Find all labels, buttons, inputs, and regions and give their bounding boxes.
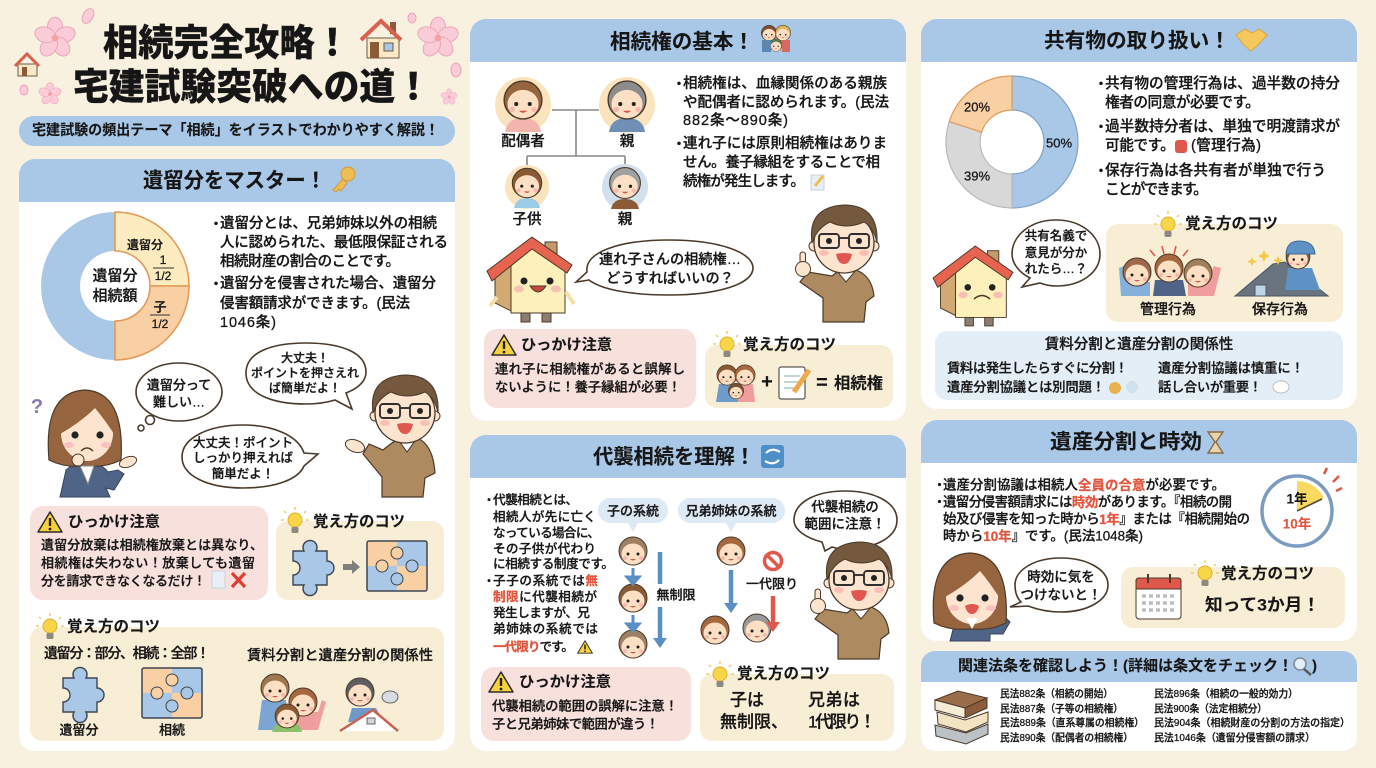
speech bubble: 連れ子 xyxy=(576,240,753,295)
bullet text: ・ xyxy=(1094,76,1108,92)
bullet text xyxy=(672,74,890,190)
panel: 代襲相続を理解 xyxy=(470,435,906,751)
family tree: 配偶者 xyxy=(501,133,545,150)
bullet text: 一代限りです。 xyxy=(493,640,574,654)
callout: 賃料分割: 話し合いが重要！ xyxy=(1158,378,1262,394)
law list column 2: 民法900条（法定相続分） xyxy=(1154,702,1267,715)
flow: 子の系統 xyxy=(598,498,696,658)
family tree: 親 xyxy=(618,211,633,228)
bullet text: 弟姉妹の系統では xyxy=(493,621,598,636)
tip box: 部分 全部: 賃料分割と遺産分割の関係性 xyxy=(247,646,433,664)
donut chart xyxy=(946,76,1078,208)
icon: man and roof xyxy=(340,678,398,731)
law list column 2: 民法896条（相続の一般的効力） xyxy=(1154,687,1298,700)
character: teacher xyxy=(344,375,440,497)
title: 宅建試験突破への道！ xyxy=(73,66,431,108)
bullet text: ことができます。 xyxy=(1105,180,1208,198)
icon: clock: 1年 xyxy=(1286,490,1308,506)
bullet text: 時から10年』です。(民法1048条) xyxy=(943,528,1143,544)
speech bubble: 連れ子: どうすればいいの？ xyxy=(606,271,734,287)
callout: ひっかけ注意: 子と兄弟姉妹で範囲が違う！ xyxy=(492,716,659,732)
bullet text: その子供が代わり xyxy=(493,541,596,556)
speech bubble: 大丈夫 lower: しっかり押えれば xyxy=(193,451,293,465)
bullet text: ・ xyxy=(1094,163,1108,179)
panel header: ) xyxy=(1312,658,1317,674)
icon: family xyxy=(258,674,326,732)
speech bubble: 大丈夫 top: ポイントを押さえれ xyxy=(251,366,359,380)
speech bubble: 難しい: 難しい… xyxy=(153,394,205,410)
callout: ひっかけ注意: ひっかけ注意 xyxy=(519,672,611,690)
title xyxy=(73,22,431,108)
bullet text: ・ xyxy=(483,574,495,588)
tip box: 養子縁組 xyxy=(705,331,893,408)
panel header: 共有物の取り扱い！ xyxy=(1044,30,1230,52)
bullet text: 始及び侵害を知った時から1年』または『相続開始の xyxy=(943,510,1250,526)
bullet text: 相続人が先に亡く xyxy=(493,509,596,524)
flow: 子の系統: 子の系統 xyxy=(607,504,659,518)
speech bubble: 連れ子: 連れ子さんの相続権… xyxy=(599,251,741,268)
speech bubble: 大丈夫 lower xyxy=(182,425,318,488)
icon: worker on roof xyxy=(1235,241,1328,296)
character: smiling woman xyxy=(933,553,1010,641)
tip box: 管理 保存: 保存行為 xyxy=(1252,301,1308,317)
family tree: 親 xyxy=(620,133,635,150)
donut chart: 子 xyxy=(153,300,167,314)
bullet text: 相続権は、血縁関係のある親族 xyxy=(683,74,888,92)
decoration: cherry blossoms xyxy=(20,7,461,106)
tip box: 3か月 xyxy=(1121,560,1345,628)
speech bubble: 難しい xyxy=(136,363,222,431)
panel header xyxy=(921,651,1357,682)
bullet text: ・ xyxy=(672,76,686,92)
tip box: 養子縁組: 相続権 xyxy=(834,374,883,392)
title: 相続完全攻略！ xyxy=(103,22,350,64)
bullet text xyxy=(209,214,448,331)
bullet text: 遺留分侵害額請求には時効があります。『相続の開 xyxy=(943,494,1232,510)
panel header xyxy=(921,420,1357,463)
character: teacher pointing xyxy=(810,542,894,659)
bullet text: や配偶者に認められます。(民法 xyxy=(683,94,890,111)
tip box: puzzle xyxy=(276,507,444,600)
icon: clock xyxy=(1262,468,1342,546)
character: worried woman xyxy=(31,390,138,497)
speech bubble: 時効: つけないと！ xyxy=(1020,588,1102,602)
tip box: 部分 全部: 遺留分 xyxy=(59,722,99,738)
law list column 2: 民法904条（相続財産の分割の方法の指定） xyxy=(1154,716,1350,729)
character: worried house xyxy=(933,246,1013,326)
bullet text: 代襲相続とは、 xyxy=(493,492,578,507)
bullet text: 882条～890条) xyxy=(683,112,788,129)
bullet text: 発生しますが、兄 xyxy=(493,605,590,620)
law list column 1 xyxy=(1000,687,1144,744)
icon: family small xyxy=(761,25,791,52)
icon: small house xyxy=(15,54,39,76)
tip box: 管理 保存 xyxy=(1106,211,1343,322)
icon: hourglass xyxy=(1208,432,1223,453)
bullet text: 続権が発生します。 xyxy=(683,172,805,190)
donut chart: 遺留分 xyxy=(92,268,138,284)
subtitle pill xyxy=(19,116,455,146)
callout: ひっかけ注意: 相続権は失わない！放棄しても遺留 xyxy=(41,556,255,570)
callout: ひっかけ注意: 連れ子に相続権があると誤解し xyxy=(495,360,685,376)
callout: 賃料分割: 賃料は発生したらすぐに分割！ xyxy=(947,360,1128,376)
tip box: 子は無制限: 1代限り！ xyxy=(808,712,876,732)
bullet text: 遺留分とは、兄弟姉妹以外の相続 xyxy=(220,214,438,232)
flow: 子の系統: 無制限 xyxy=(656,588,696,602)
icon: sync xyxy=(761,445,784,468)
callout: 賃料分割: 遺産分割協議は慎重に！ xyxy=(1158,360,1304,376)
icon: group xyxy=(1119,246,1221,296)
subtitle pill: 宅建試験の頻出テーマ「相続」をイラストでわかりやすく解説！ xyxy=(32,121,439,139)
callout: ひっかけ注意 xyxy=(30,506,268,600)
speech bubble: 範囲: 範囲に注意！ xyxy=(804,516,886,532)
speech bubble: 時効 xyxy=(1010,558,1108,612)
callout: ひっかけ注意: 代襲相続の範囲の誤解に注意！ xyxy=(492,698,678,714)
bullet text: 1046条) xyxy=(220,314,276,331)
icon: house in title xyxy=(361,21,401,58)
panel header: 関連法条を確認しよう！(詳細は条文をチェック！ xyxy=(958,656,1293,674)
flow: 兄弟姉妹の系統: 兄弟姉妹の系統 xyxy=(685,504,777,518)
speech bubble: 範囲: 代襲相続の xyxy=(811,498,879,514)
speech bubble: 大丈夫 lower: 簡単だよ！ xyxy=(212,466,274,481)
bullet text: 共有物の管理行為は、過半数の持分 xyxy=(1105,74,1340,92)
speech bubble: 大丈夫 top: ば簡単だよ！ xyxy=(269,380,341,395)
flow: 兄弟姉妹の系統 xyxy=(678,498,798,644)
panel header xyxy=(921,19,1357,62)
tip box: 3か月: 知って3か月！ xyxy=(1205,596,1320,614)
panel header: 相続権の基本！ xyxy=(610,30,754,54)
panel header: 遺産分割と時効 xyxy=(1050,430,1202,454)
speech bubble: 難しい: 遺留分って xyxy=(147,378,211,392)
panel header xyxy=(19,159,455,202)
bullet text xyxy=(483,492,614,654)
speech bubble: 共有: 意見が分か xyxy=(1025,245,1088,260)
donut chart: 39% xyxy=(964,168,990,184)
bullet text: ・ xyxy=(672,136,686,152)
icon: magnifier xyxy=(1294,658,1311,675)
bullet text: なっている場合に、 xyxy=(493,525,600,540)
tip box: 養子縁組: 覚え方のコツ xyxy=(743,334,836,354)
tip box: 子は無制限: 子は xyxy=(730,690,764,710)
law list column 1: 民法890条（配偶者の相続権） xyxy=(1000,731,1133,744)
callout: 賃料分割: 遺産分割協議とは別問題！ xyxy=(947,378,1105,394)
panel header xyxy=(470,19,906,62)
panel header: 遺留分をマスター！ xyxy=(143,170,326,192)
tip box: 3か月: 覚え方のコツ xyxy=(1221,564,1314,582)
law list column 1: 民法882条（相続の開始） xyxy=(1000,687,1113,700)
bullet text: ・ xyxy=(483,493,495,507)
callout: ひっかけ注意: 分を請求できなくなるだけ！ xyxy=(41,574,206,588)
panel: 遺留分をマスター xyxy=(19,159,455,751)
tip box: 部分 全部 xyxy=(30,613,444,741)
donut chart xyxy=(41,212,189,360)
bullet text: せん。養子縁組をすることで相 xyxy=(683,154,880,171)
panel: 相続権の基本 xyxy=(470,19,906,421)
bullet text: ・ xyxy=(209,276,223,292)
callout: ひっかけ注意: ひっかけ注意 xyxy=(521,336,612,354)
panel: 遺産分割と時効 xyxy=(921,420,1357,641)
tip box: 部分 全部: 覚え方のコツ xyxy=(67,616,160,636)
family tree: 子供 xyxy=(512,211,542,228)
callout: ひっかけ注意 xyxy=(481,667,691,741)
donut chart: 1 xyxy=(160,253,167,267)
icon: clock: 10年 xyxy=(1283,516,1311,532)
callout: 賃料分割: 賃料分割と遺産分割の関係性 xyxy=(1045,335,1233,353)
callout: 賃料分割 xyxy=(935,331,1343,400)
tip box: 部分 全部: 相続 xyxy=(159,722,185,738)
speech bubble: 大丈夫 top: 大丈夫！ xyxy=(281,350,329,365)
donut chart: 50% xyxy=(1046,136,1072,150)
icon: books xyxy=(935,691,988,744)
panel header: 代襲相続を理解！ xyxy=(593,446,755,468)
bullet text: 遺留分を侵害された場合、遺留分 xyxy=(220,274,436,292)
bullet text: 侵害額請求ができます。(民法 xyxy=(220,294,410,312)
bullet text: 制限に代襲相続が xyxy=(493,589,597,604)
bullet text: ・ xyxy=(209,216,223,232)
bullet text: 権者の同意が必要です。 xyxy=(1105,93,1260,111)
law list column 2: 民法1046条（遺留分侵害額の請求） xyxy=(1154,731,1315,744)
tip box: 子は無制限: 覚え方のコツ xyxy=(737,664,830,682)
tip box: 管理 保存: 覚え方のコツ xyxy=(1185,214,1278,232)
speech bubble: 共有 xyxy=(1012,220,1100,287)
callout: ひっかけ注意: 遺留分放棄は相続権放棄とは異なり、 xyxy=(41,538,263,552)
bullet text: に相続する制度です。 xyxy=(493,556,614,571)
donut chart: 相続額 xyxy=(92,286,138,304)
bullet text xyxy=(933,476,1250,544)
bullet text: 連れ子には原則相続権はありま xyxy=(683,134,887,152)
tip box: 子は無制限: 無制限、 xyxy=(720,712,788,732)
panel header xyxy=(470,435,906,478)
callout: ひっかけ注意: ひっかけ注意 xyxy=(68,512,160,530)
bullet text: 相続財産の割合のことです。 xyxy=(220,252,400,270)
bullet text: 人に認められた、最低限保証される xyxy=(220,234,448,251)
speech bubble: 時効: 時効に気を xyxy=(1027,570,1095,584)
donut chart: 1/2 xyxy=(152,317,169,331)
donut chart: 20% xyxy=(964,100,990,114)
law list column 2 xyxy=(1154,687,1350,744)
tip box: 部分 全部: 遺留分：部分、相続：全部！ xyxy=(44,645,210,661)
tip box: 子は無制限 xyxy=(700,661,894,741)
character: teacher pointing xyxy=(796,205,879,322)
bullet text: 可能です。 xyxy=(1105,137,1175,154)
speech bubble: 範囲 xyxy=(794,491,897,551)
speech bubble: 共有: れたら…？ xyxy=(1025,262,1087,276)
panel: 共有物の取り扱い xyxy=(921,19,1357,409)
tip box: 養子縁組: = xyxy=(816,372,828,394)
bullet text: ・ xyxy=(933,478,946,492)
speech bubble: 大丈夫 top xyxy=(246,343,366,409)
bullet text: (管理行為) xyxy=(1191,136,1261,154)
speech bubble: 大丈夫 lower: 大丈夫！ポイント xyxy=(193,435,293,450)
law list column 1: 民法887条（子等の相続権） xyxy=(1000,702,1123,715)
family tree xyxy=(495,77,655,228)
bullet text: 保存行為は各共有者が単独で行う xyxy=(1105,161,1326,179)
donut chart: 遺留分 xyxy=(127,237,163,252)
law list column 1: 民法889条（直系尊属の相続権） xyxy=(1000,716,1144,729)
tip box: 管理 保存: 管理行為 xyxy=(1140,301,1196,317)
callout: ひっかけ注意: ないように！養子縁組が必要！ xyxy=(495,378,681,394)
bullet text: ・ xyxy=(933,494,946,510)
icon: handshake xyxy=(1236,29,1267,51)
speech bubble: 共有: 共有名義で xyxy=(1025,228,1087,243)
callout: ひっかけ注意 xyxy=(484,329,696,408)
tip box: puzzle: 覚え方のコツ xyxy=(313,512,405,530)
tip box: 子は無制限: 兄弟は xyxy=(808,690,860,710)
bullet text: 子子の系統では無 xyxy=(493,573,598,588)
donut chart: 1/2 xyxy=(155,269,172,283)
bullet text xyxy=(1094,74,1340,198)
tip box: 養子縁組: + xyxy=(761,371,773,393)
character: worried woman: ? xyxy=(31,396,43,418)
bullet text: 遺産分割協議は相続人全員の合意が必要です。 xyxy=(943,476,1225,492)
bullet text: 過半数持分者は、単独で明渡請求が xyxy=(1105,117,1340,135)
character: house xyxy=(487,237,574,322)
bullet text: ・ xyxy=(1094,119,1108,135)
flow: 兄弟姉妹の系統: 一代限り xyxy=(746,576,798,592)
icon: key xyxy=(333,167,355,192)
panel: 関連法条 xyxy=(921,651,1357,751)
